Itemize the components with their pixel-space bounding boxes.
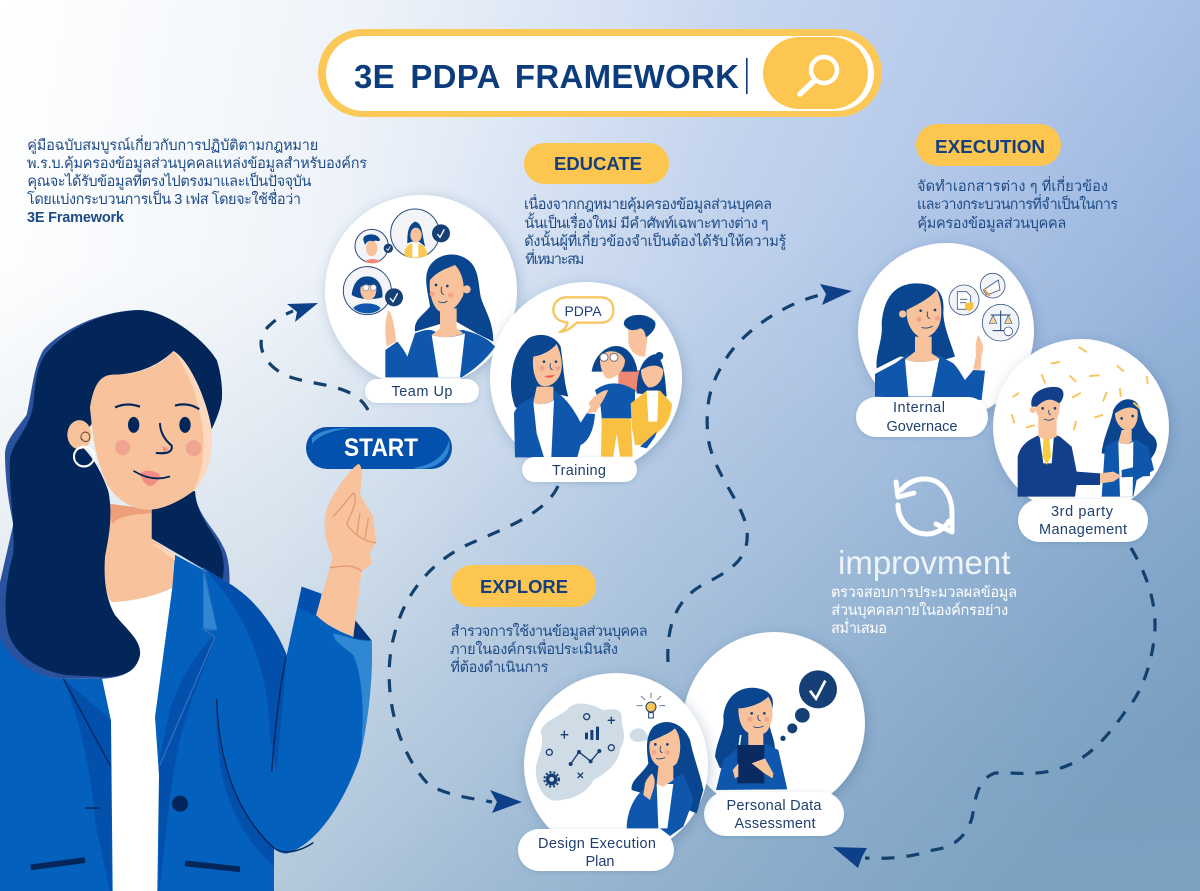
hero hair back	[152, 491, 230, 585]
panel: training	[490, 282, 682, 482]
dashed arrow: start to team up	[261, 303, 368, 410]
governance icons	[949, 273, 1019, 341]
intro text block: พ.ร.บ.คุ้มครองข้อมูลส่วนบุคคลแหล่งข้อมูลสำหรับองค์กร	[27, 155, 367, 172]
speech bubble	[553, 297, 613, 332]
woman handshake	[1100, 399, 1157, 497]
intro text block: โดยแบ่งกระบวนการเป็น 3 เฟส โดยจะใช้ชื่อว่า	[27, 189, 301, 208]
intro text block: คุณจะได้รับข้อมูลที่ตรงไปตรงมาและเป็นปัจจุบัน	[27, 171, 312, 190]
design plan label	[518, 829, 674, 871]
hero jacket	[0, 555, 372, 891]
heading: execution	[916, 124, 1061, 166]
personal data label: Personal Data	[726, 798, 822, 814]
heading: execution: EXECUTION	[935, 137, 1045, 157]
hero pockets and button	[31, 796, 240, 869]
heading: explore: EXPLORE	[480, 577, 568, 597]
panel: personal data assessment	[683, 632, 865, 836]
training group	[588, 315, 672, 457]
internal governance label	[856, 397, 988, 437]
hero woman illustration	[0, 310, 376, 891]
light bulb	[637, 693, 665, 718]
intro text block	[27, 135, 367, 226]
dashed arrow: personal data to execution	[668, 284, 852, 662]
internal governance label: Governace	[886, 419, 958, 435]
design woman	[627, 722, 703, 836]
heading: explore	[451, 565, 596, 607]
execution text: จัดทำเอกสารต่าง ๆ ที่เกี่ยวข้อง	[917, 176, 1108, 195]
team up woman	[385, 254, 495, 377]
explore text	[450, 622, 648, 676]
PDPA label: PDPA	[564, 303, 602, 319]
educate text	[524, 194, 786, 268]
man in suit	[1018, 387, 1100, 497]
intro text block: 3E Framework	[27, 210, 125, 226]
hero sleeve inner	[298, 587, 322, 616]
dashed arrow: third party to personal data	[833, 548, 1155, 868]
title text: 3E PDPA FRAMEWORK	[354, 58, 739, 95]
explore text: ภายในองค์กรเพื่อประเมินสิ่ง	[450, 639, 618, 658]
educate text: ที่เหมาะสม	[525, 249, 584, 268]
heading: educate	[524, 143, 669, 184]
improvement text: สม่ำเสมอ	[831, 618, 887, 637]
heading: educate: EDUCATE	[554, 154, 642, 174]
dashed arrow: training to design plan	[389, 486, 558, 813]
panel: design execution plan	[518, 673, 708, 871]
training label: Training	[552, 463, 606, 479]
improvement text: ตรวจสอบการประมวลผลข้อมูล	[831, 584, 1017, 601]
design plan label: Plan	[586, 854, 614, 870]
hero hand	[316, 464, 376, 637]
idea cloud	[536, 703, 648, 801]
execution text: และวางกระบวนการที่จำเป็นในการ	[917, 194, 1118, 213]
hero face	[67, 351, 212, 510]
panel: team up	[325, 195, 517, 403]
educate text: ดังนั้นผู้ที่เกี่ยวข้องจำเป็นต้องได้รับให้ความรู้	[524, 230, 786, 250]
avatars	[343, 209, 439, 315]
panel: third party management	[993, 339, 1169, 542]
team up label	[365, 379, 479, 403]
governance woman	[875, 283, 985, 400]
START button	[306, 427, 452, 469]
improvement heading: improvment	[838, 544, 1010, 581]
confetti	[1012, 347, 1148, 429]
thought bubble check	[780, 670, 837, 741]
explore text: ที่ต้องดำเนินการ	[450, 657, 549, 676]
third party label	[1018, 499, 1148, 542]
third party label: Management	[1039, 522, 1127, 538]
assessment woman	[715, 688, 787, 790]
search bar title	[318, 29, 882, 117]
internal governance label: Internal	[893, 400, 945, 416]
educate text: นั้นเป็นเรื่องใหม่ มีคำศัพท์เฉพาะทางต่าง ๆ	[525, 212, 769, 232]
hero hair front	[0, 310, 222, 679]
execution text: คุ้มครองข้อมูลส่วนบุคคล	[917, 215, 1066, 232]
execution text	[917, 176, 1118, 232]
training presenter	[511, 335, 610, 457]
START label: START	[344, 434, 418, 462]
icon: magnifier	[800, 57, 837, 94]
hero earring	[74, 447, 94, 466]
improvement text: ส่วนบุคคลภายในองค์กรอย่าง	[831, 601, 1008, 619]
educate text: เนื่องจากกฎหมายคุ้มครองข้อมูลส่วนบุคคล	[524, 194, 772, 213]
personal data label	[704, 792, 844, 836]
improvement text	[831, 584, 1017, 637]
training label	[522, 457, 637, 482]
design plan label: Design Execution	[538, 836, 656, 852]
third party label: 3rd party	[1051, 504, 1114, 520]
intro text block: คู่มือฉบับสมบูรณ์เกี่ยวกับการปฏิบัติตามกฎหมาย	[27, 135, 318, 154]
panel: internal governance	[856, 243, 1034, 437]
hero lapel lines	[63, 657, 313, 852]
explore text: สำรวจการใช้งานข้อมูลส่วนบุคคล	[451, 622, 648, 640]
hero neck	[100, 506, 175, 602]
icon: improvement cycle arrows	[896, 479, 952, 534]
hero shirt	[102, 588, 172, 891]
personal data label: Assessment	[734, 816, 816, 832]
search button	[763, 37, 868, 109]
check badges	[384, 224, 450, 306]
team up label: Team Up	[392, 384, 452, 400]
